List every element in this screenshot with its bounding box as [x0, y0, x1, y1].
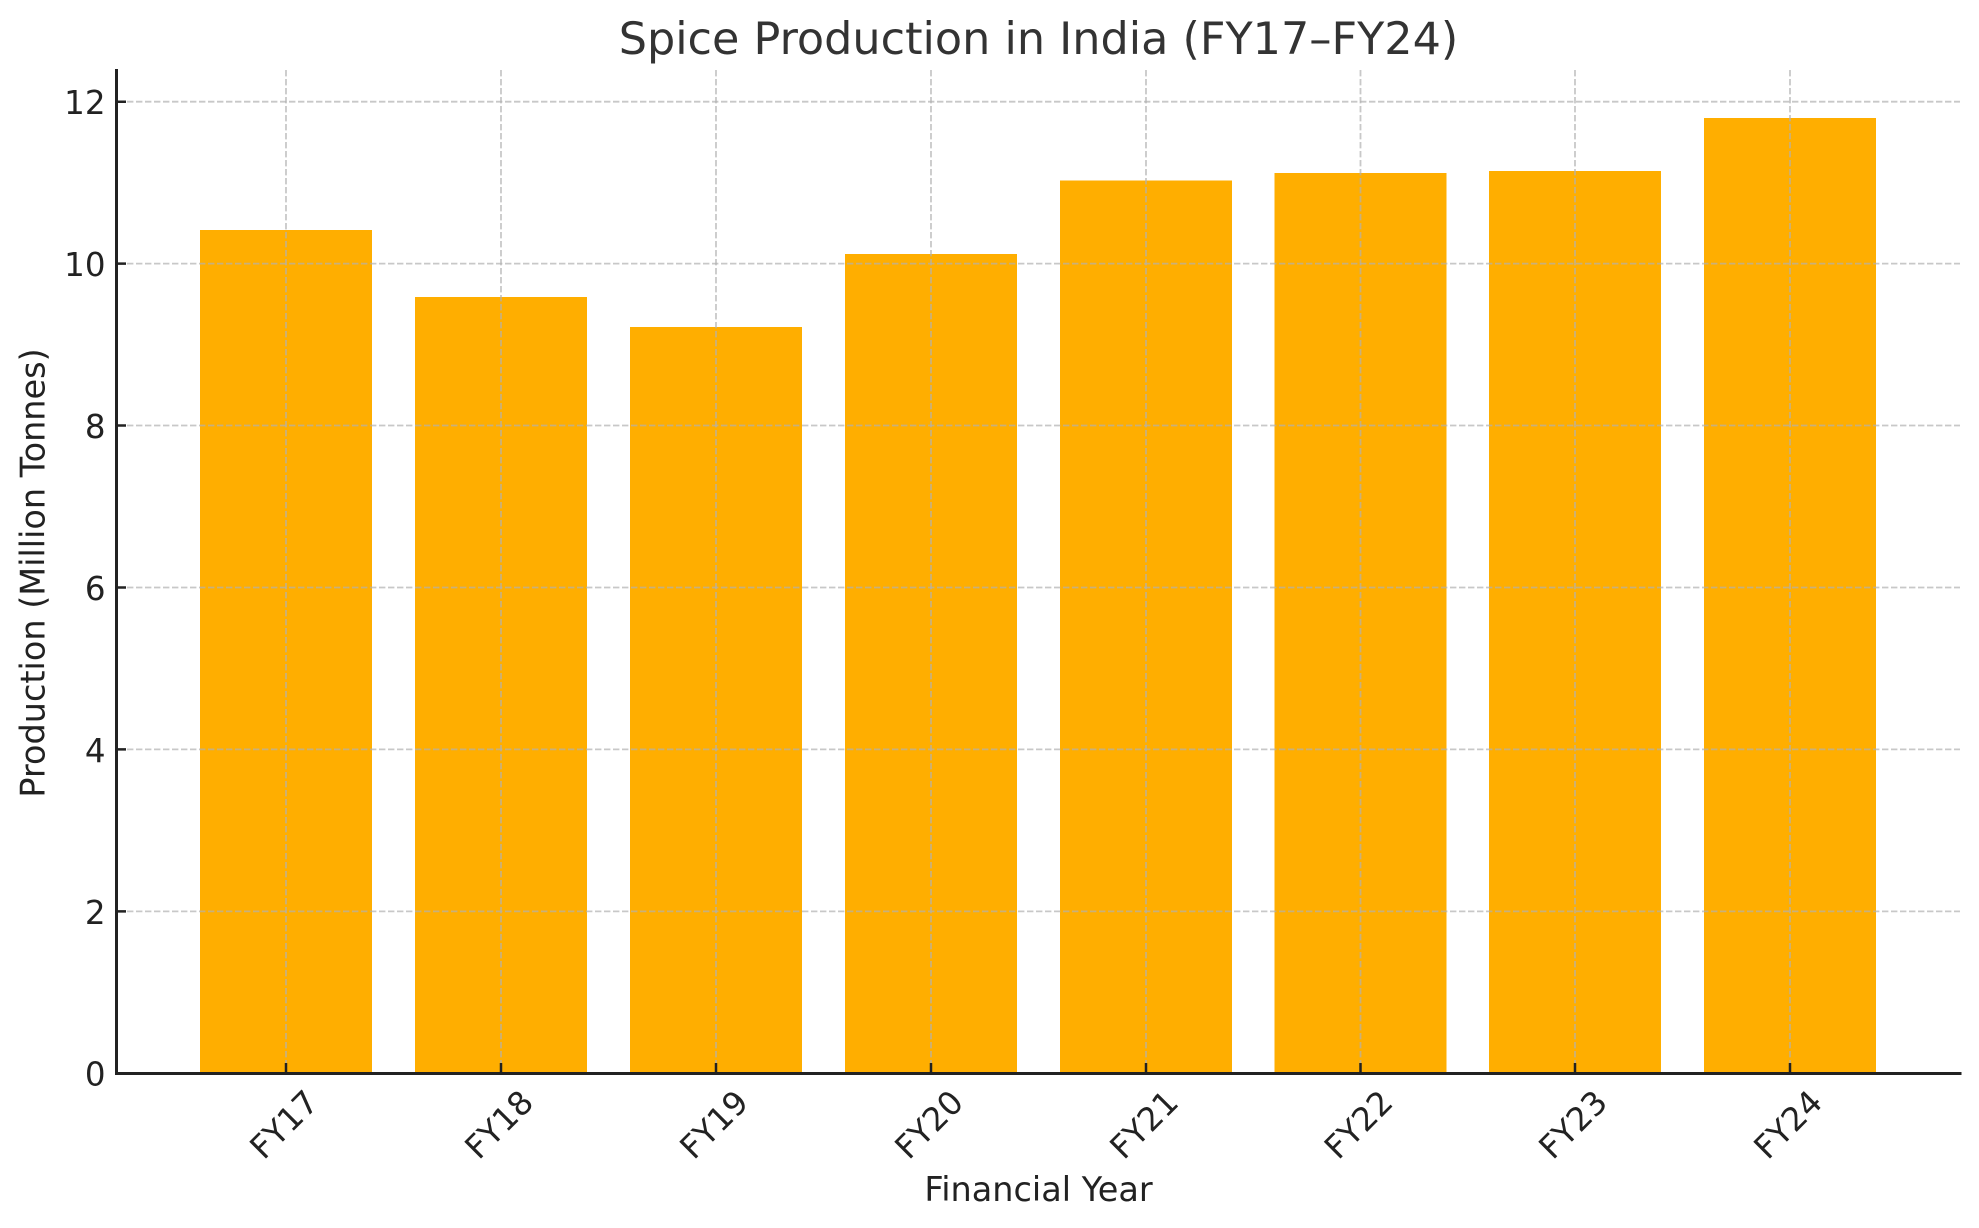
bar: FY18 [415, 297, 587, 1074]
x axis tick labels: FY18 [458, 1083, 541, 1166]
y axis tick labels [64, 84, 106, 1094]
y axis tick labels: 12 [64, 84, 106, 122]
bar: FY17 [200, 230, 372, 1074]
x axis tick labels: FY19 [673, 1083, 756, 1166]
x axis tick labels: FY20 [888, 1083, 971, 1166]
bar: FY24 [1704, 118, 1876, 1074]
x axis label: Financial Year [924, 1170, 1153, 1209]
x axis tick labels: FY23 [1532, 1083, 1615, 1166]
y axis tick labels: 2 [85, 894, 106, 932]
x axis tick labels: FY24 [1747, 1083, 1830, 1166]
bar: FY21 [1060, 180, 1232, 1074]
y axis tick labels: 0 [85, 1056, 106, 1094]
y axis tick labels: 6 [85, 570, 106, 608]
x axis tick labels: FY17 [243, 1083, 326, 1166]
y axis tick labels: 8 [85, 408, 106, 446]
y axis tick labels: 10 [64, 246, 106, 284]
x axis tick labels: FY22 [1317, 1083, 1400, 1166]
bar: FY23 [1489, 171, 1661, 1074]
x axis tick labels [243, 1083, 1830, 1166]
bar: FY22 [1274, 173, 1446, 1074]
y axis tick labels: 4 [85, 732, 106, 770]
y axis label: Production (Million Tonnes) [14, 348, 52, 798]
axes [116, 69, 1962, 1074]
x axis tick labels: FY21 [1103, 1083, 1186, 1166]
bar: FY20 [845, 254, 1017, 1074]
bars [200, 118, 1876, 1074]
title: Spice Production in India (FY17–FY24) [619, 14, 1458, 65]
bar: FY19 [630, 327, 802, 1074]
